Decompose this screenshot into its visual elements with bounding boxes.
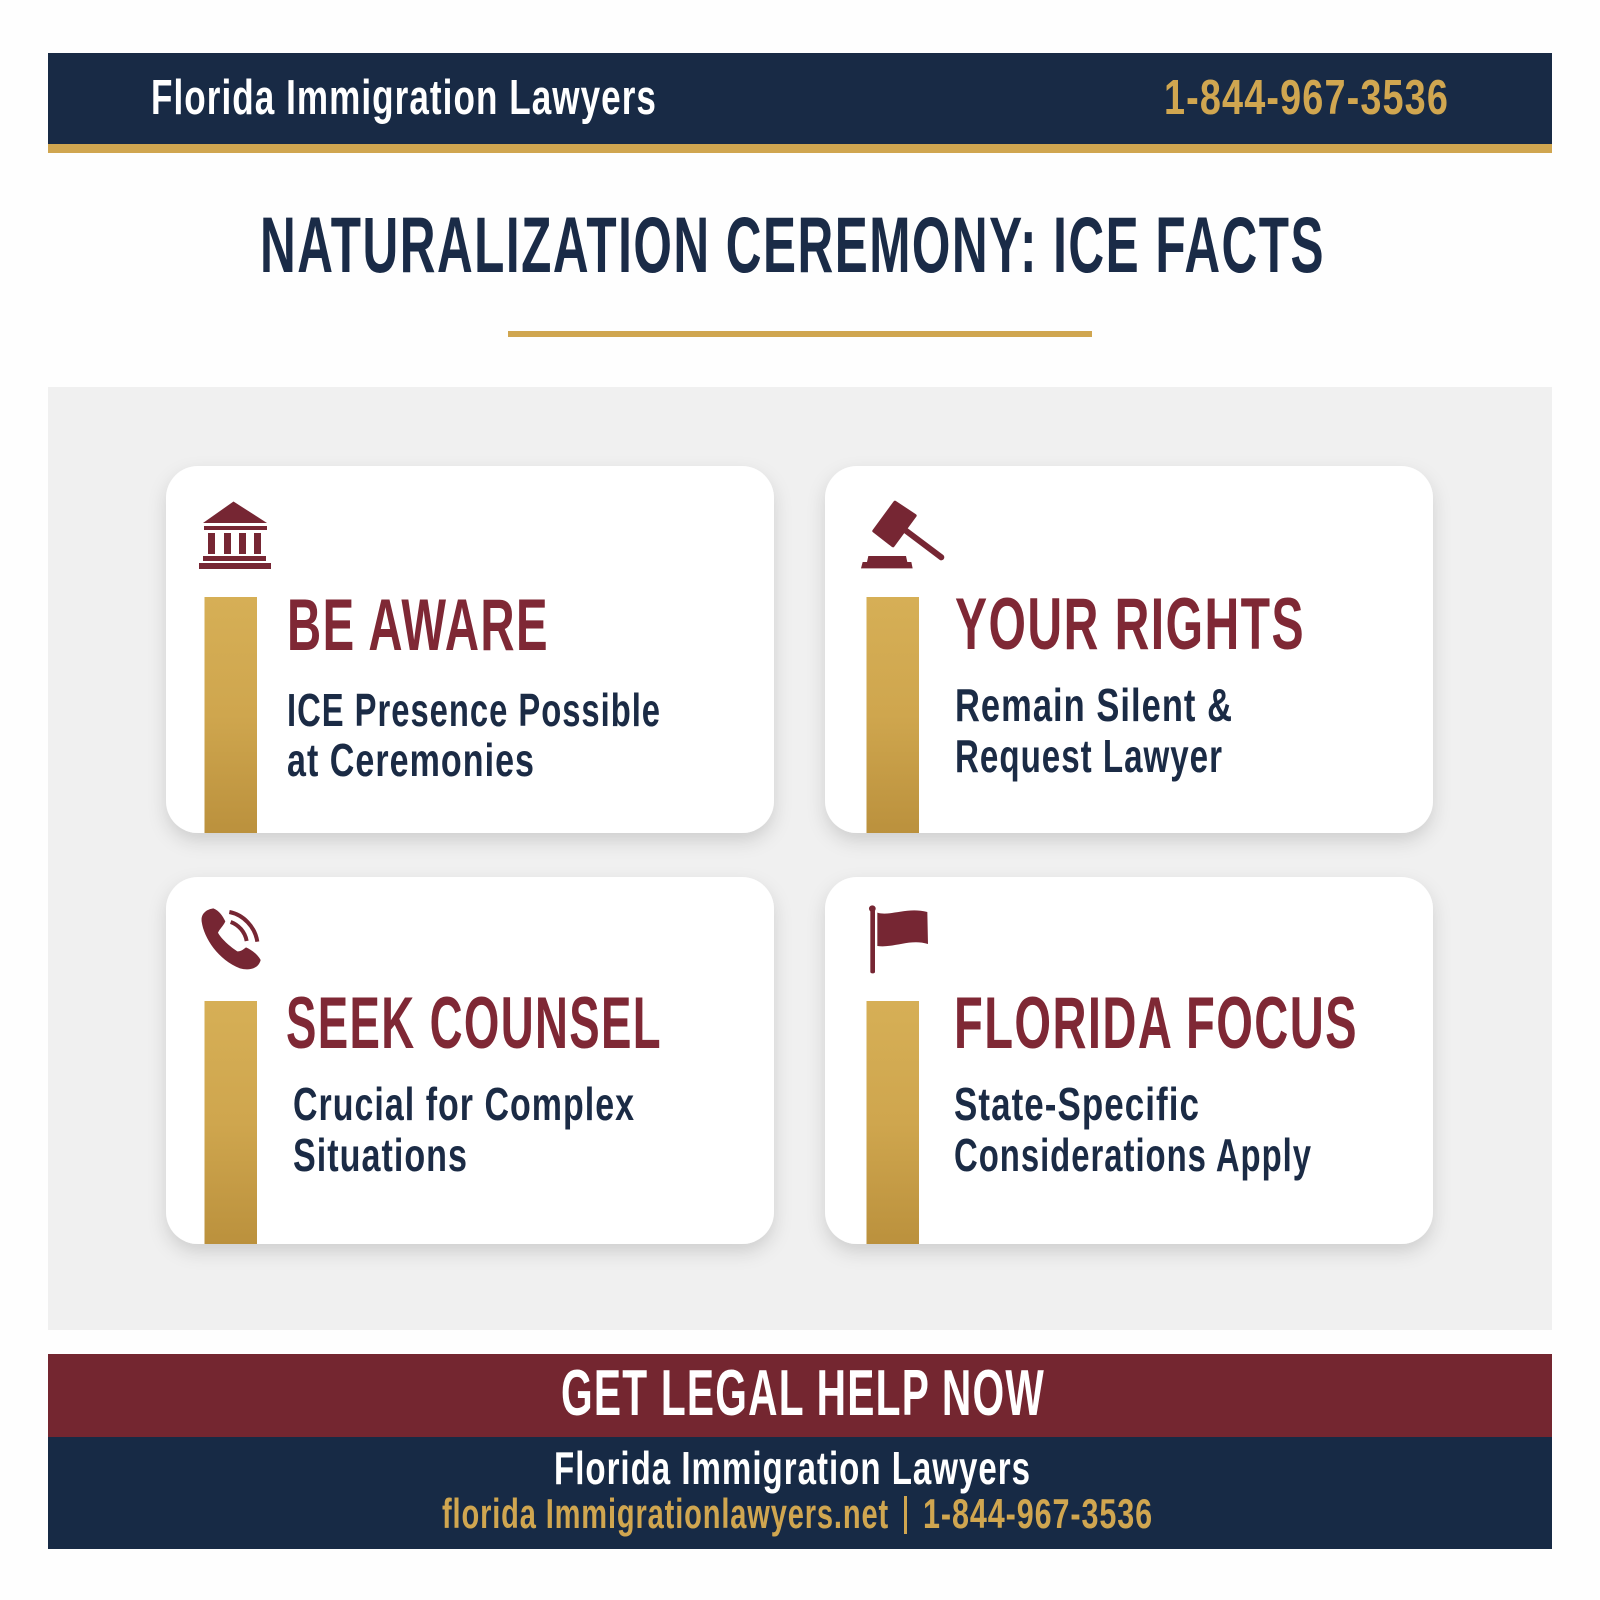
description	[287, 684, 661, 786]
gold bar	[866, 1001, 919, 1244]
header firm name: Florida Immigration Lawyers	[151, 71, 657, 125]
gold bar	[866, 597, 919, 833]
call to action text: GET LEGAL HELP NOW	[561, 1356, 1045, 1429]
header bar	[48, 53, 1552, 153]
gold bar	[204, 597, 257, 833]
description	[955, 679, 1233, 782]
footer contact bar	[48, 1437, 1552, 1549]
description: at Ceremonies	[287, 734, 535, 786]
card: seek counsel	[166, 877, 774, 1244]
header phone number: 1-844-967-3536	[1164, 71, 1449, 125]
heading: BE AWARE	[287, 585, 549, 666]
description: Remain Silent &	[955, 679, 1233, 731]
call to action banner	[48, 1354, 1552, 1437]
description: State-Specific	[954, 1078, 1200, 1130]
heading: FLORIDA FOCUS	[954, 983, 1358, 1064]
description: Situations	[293, 1129, 468, 1181]
description: Crucial for Complex	[293, 1078, 635, 1130]
icon: phone	[202, 908, 261, 969]
card: be aware	[166, 466, 774, 833]
icon: gavel	[861, 502, 941, 568]
title underline	[508, 331, 1092, 337]
heading: SEEK COUNSEL	[286, 983, 662, 1064]
icon: flag	[869, 905, 928, 973]
gold bar	[204, 1001, 257, 1244]
description: Request Lawyer	[955, 730, 1223, 782]
footer website and phone: 1-844-967-3536	[923, 1490, 1153, 1537]
card: your rights	[825, 466, 1433, 833]
footer website and phone: florida Immigrationlawyers.net	[442, 1490, 889, 1537]
description: Considerations Apply	[954, 1129, 1312, 1181]
heading: YOUR RIGHTS	[955, 584, 1305, 665]
footer firm name: Florida Immigration Lawyers	[554, 1442, 1031, 1494]
description	[954, 1078, 1312, 1181]
description: ICE Presence Possible	[287, 684, 661, 736]
icon: courthouse	[199, 502, 271, 569]
description	[293, 1078, 635, 1181]
panel: facts background	[48, 387, 1552, 1330]
card: florida focus	[825, 877, 1433, 1244]
